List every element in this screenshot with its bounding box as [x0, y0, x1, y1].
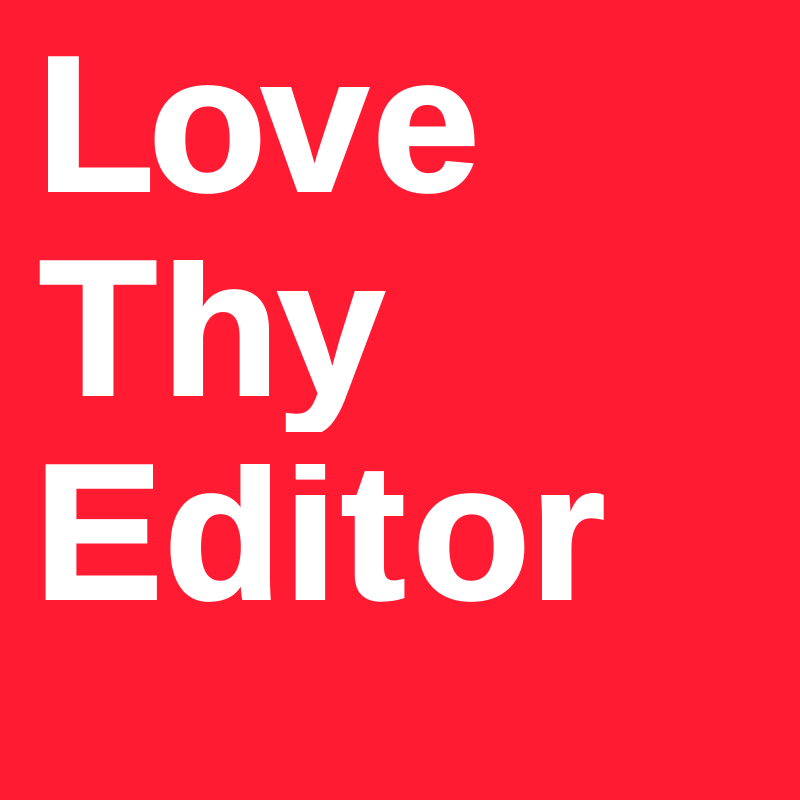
title: Love Thy Editor	[40, 56, 604, 602]
title line: Editor: Editor	[34, 424, 605, 640]
title line: Love: Love	[37, 16, 480, 232]
title line: Thy: Thy	[39, 220, 385, 436]
